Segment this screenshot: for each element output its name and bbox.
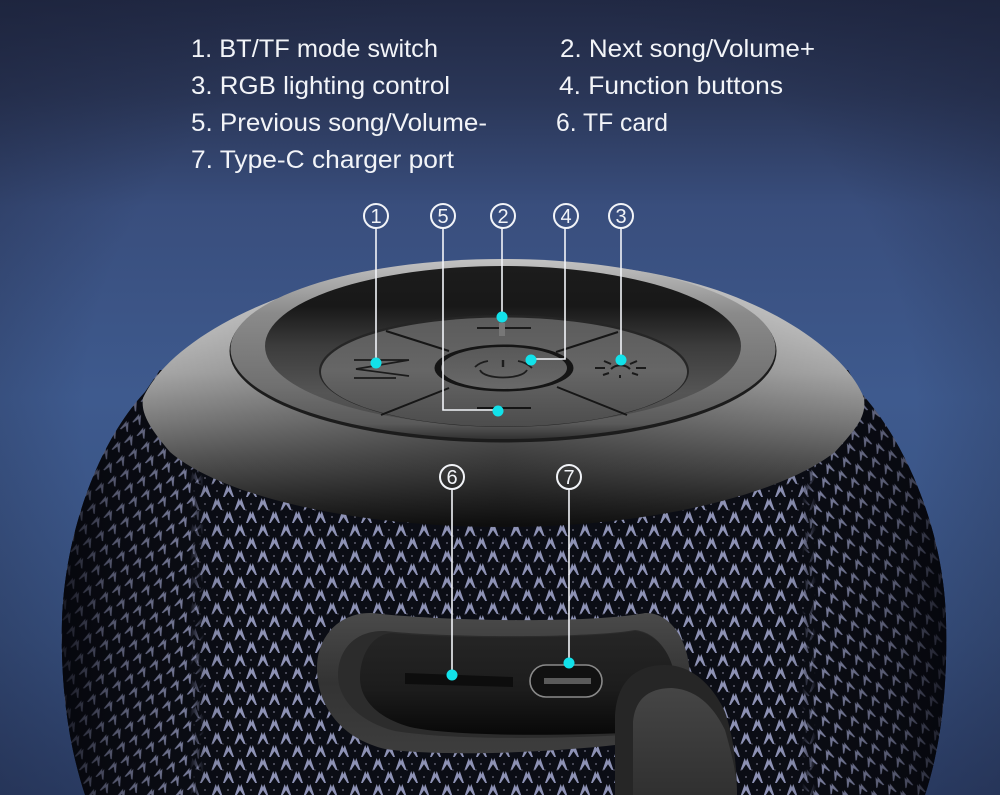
icon: light sun	[595, 361, 646, 378]
button disc	[319, 315, 689, 427]
item 6: 6. TF card	[556, 109, 668, 137]
callout 6: 6	[446, 467, 458, 489]
list of functions	[191, 35, 815, 174]
item 7: 7. Type-C charger port	[191, 146, 454, 174]
callout 1	[364, 204, 388, 368]
callout 5: 5	[437, 206, 449, 228]
item 5: 5. Previous song/Volume-	[191, 109, 487, 137]
panel: speaker top cap	[143, 259, 864, 527]
item 4: 4. Function buttons	[559, 72, 783, 100]
callout 3: 3	[615, 206, 627, 228]
icon: M mode	[354, 360, 409, 378]
item 2: 2. Next song/Volume+	[560, 35, 815, 63]
callout 6	[440, 465, 464, 680]
icon: plus	[477, 327, 531, 329]
inner well	[265, 266, 741, 426]
callout 4: 4	[560, 206, 572, 228]
icon: minus	[477, 407, 531, 409]
TF card slot	[405, 673, 513, 687]
item 3: 3. RGB lighting control	[191, 72, 450, 100]
button dividers	[381, 331, 627, 415]
center power button	[434, 344, 574, 392]
panel: port recess	[317, 613, 737, 795]
callout 4	[526, 204, 578, 366]
callout 7: 7	[563, 467, 575, 489]
outer ring	[230, 260, 776, 442]
callout 2: 2	[497, 206, 509, 228]
callout 7	[557, 465, 581, 668]
callout 3	[609, 204, 633, 366]
panel: speaker body fabric	[40, 360, 970, 795]
callout 1: 1	[370, 206, 382, 228]
Type-C port	[530, 665, 602, 697]
item 1: 1. BT/TF mode switch	[191, 35, 438, 63]
callout 2	[491, 204, 515, 322]
icon: plus nub	[499, 323, 505, 336]
port cavity	[360, 631, 673, 735]
rubber plug strap	[615, 665, 737, 795]
callout 5	[431, 204, 504, 416]
